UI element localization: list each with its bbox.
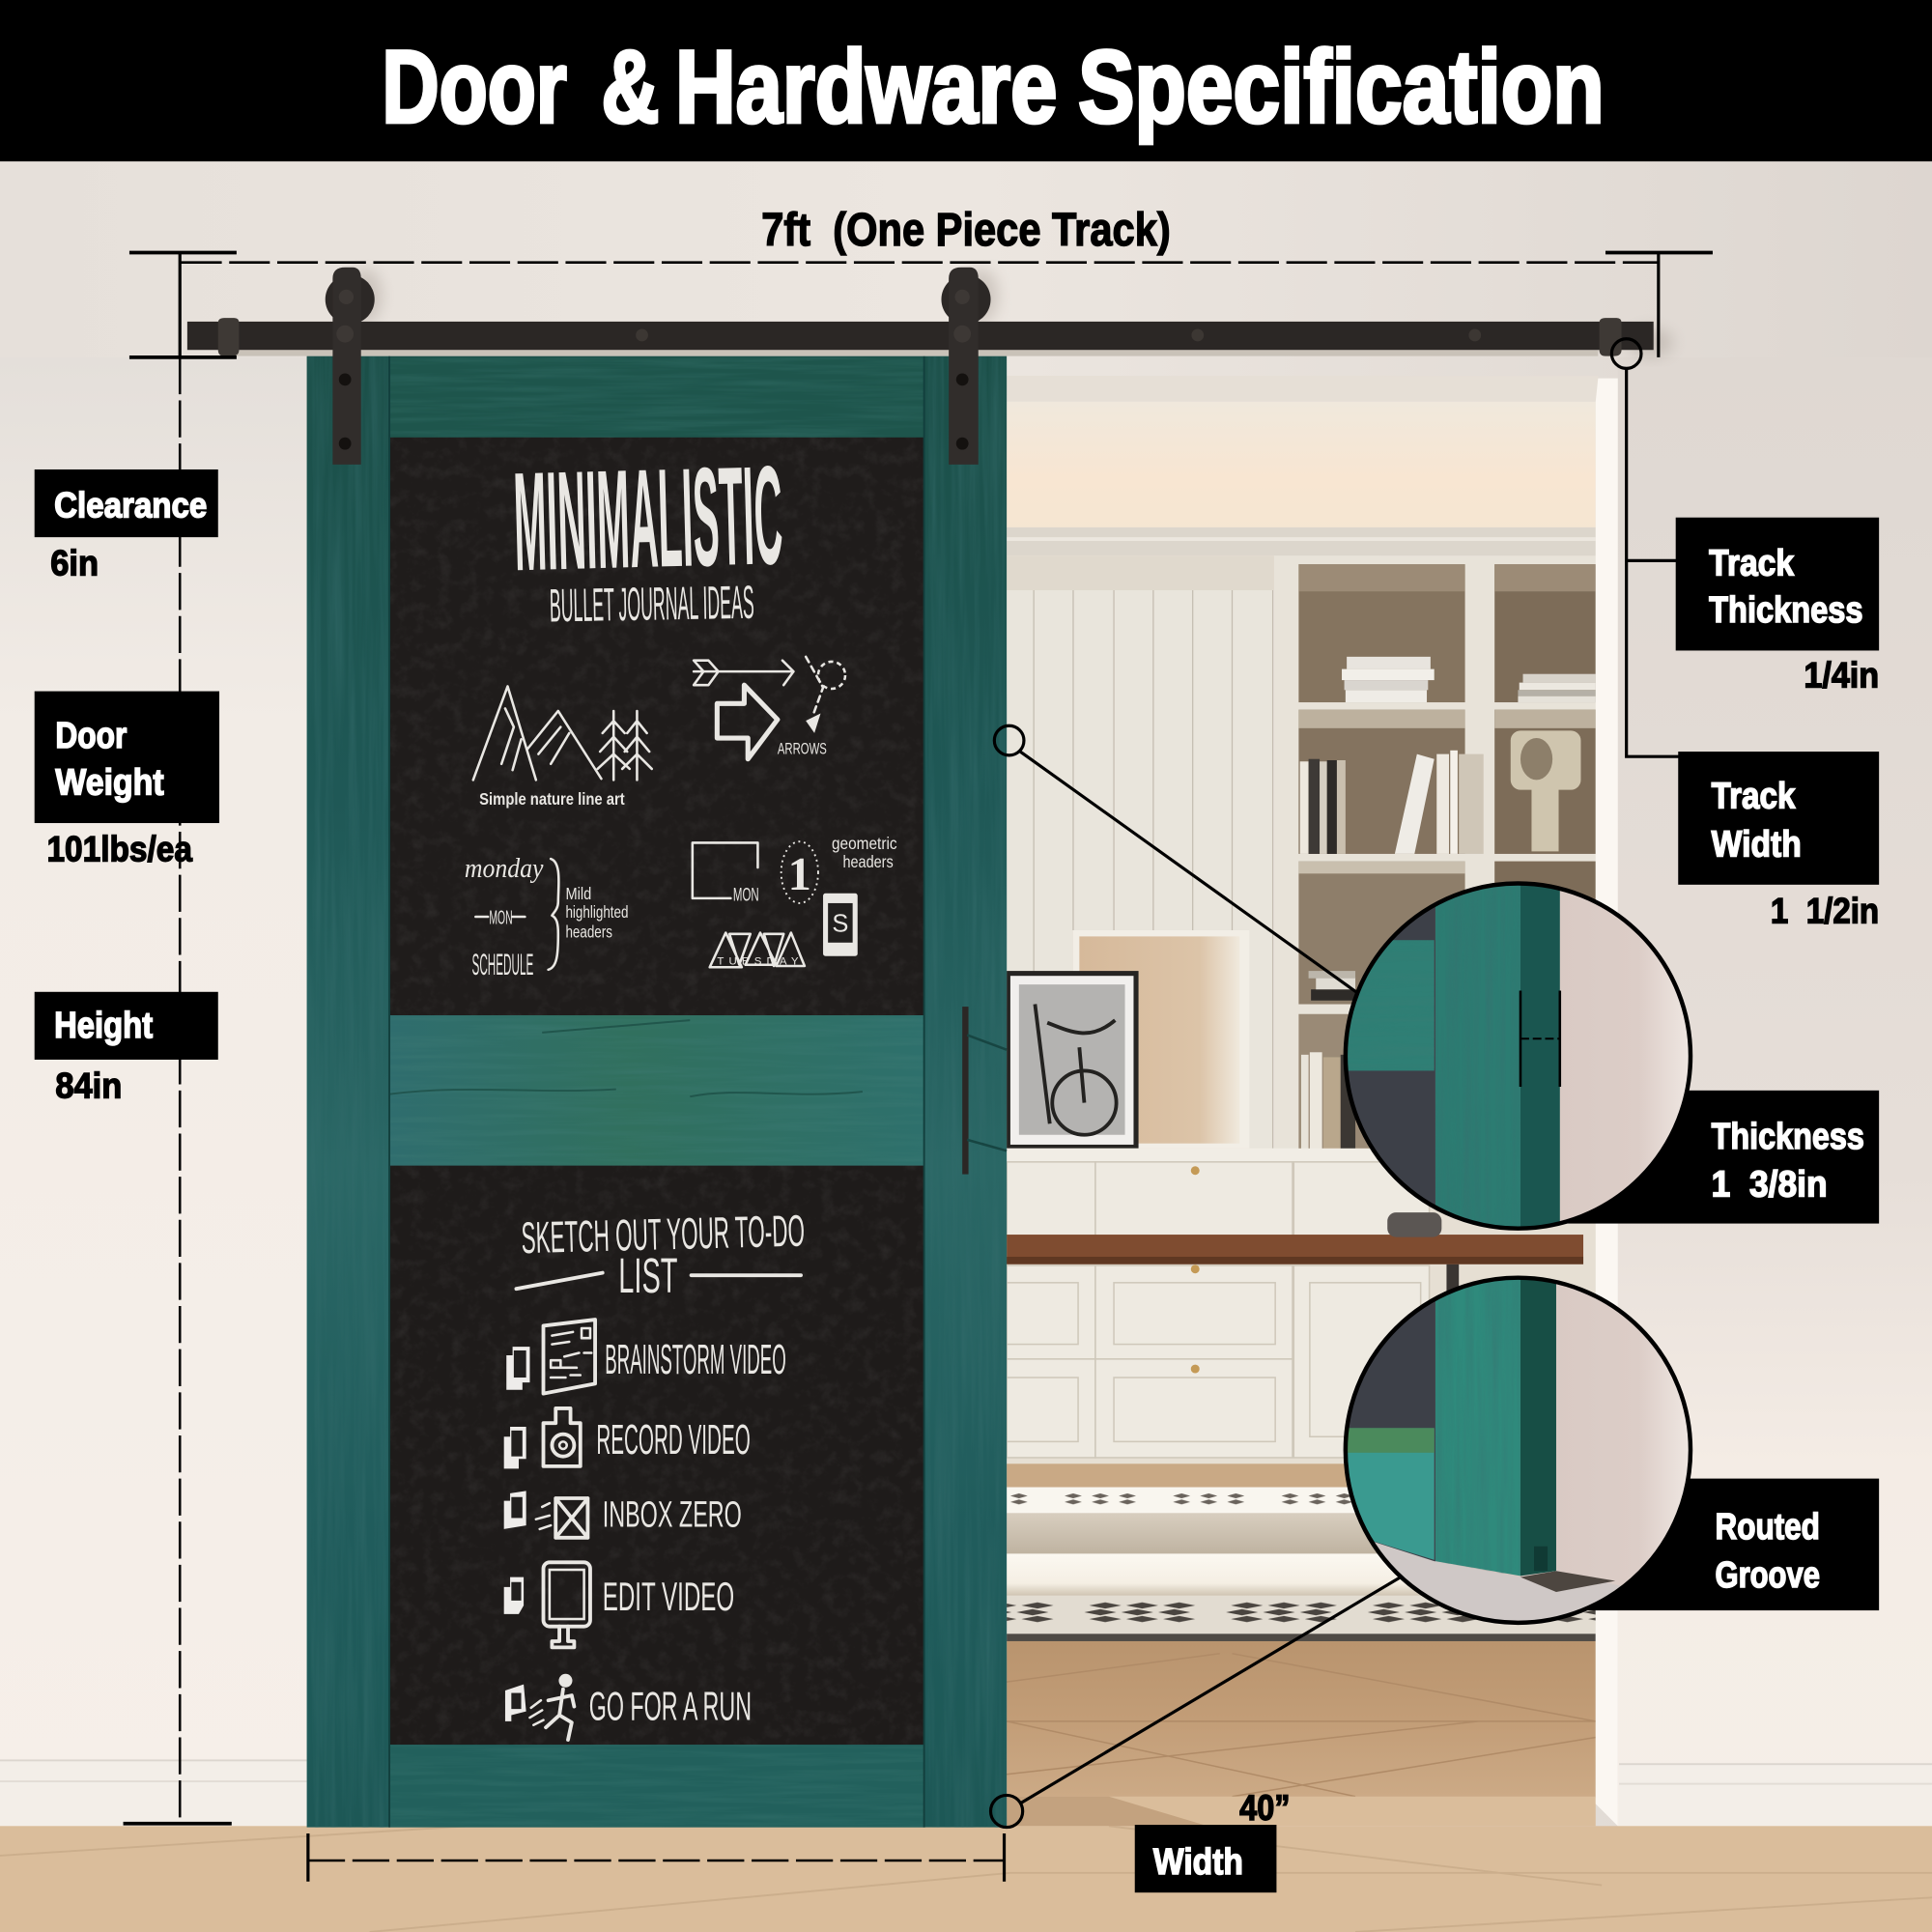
label: door weight: Weight	[55, 762, 164, 804]
checklist: edit video	[504, 1562, 734, 1647]
rug and interior floor	[1007, 1463, 1596, 1826]
lower chalkboard panel	[389, 1166, 924, 1745]
mild highlighted headers: SCHEDULE	[472, 947, 533, 981]
title banner: &	[601, 28, 659, 144]
mild highlighted headers: highlighted	[565, 902, 629, 922]
value: width: 40”	[1239, 1788, 1290, 1828]
dimension: door width	[308, 1833, 1005, 1882]
track stop left	[218, 318, 239, 356]
value: door weight: 101lbs/ea	[46, 830, 192, 869]
value: track thickness: 1/4in	[1804, 656, 1879, 696]
geometric headers: TUESDAY	[717, 956, 799, 968]
label: width	[1135, 1825, 1276, 1892]
label: thickness	[1518, 1091, 1879, 1224]
mild highlighted headers: headers	[565, 923, 612, 942]
icon: arrows	[694, 657, 845, 759]
top rail	[389, 357, 924, 438]
label: clearance	[35, 469, 218, 537]
checklist: edit video: EDIT VIDEO	[603, 1574, 734, 1619]
sliding track	[187, 322, 1654, 356]
label: routed groove	[1518, 1479, 1879, 1610]
geometric headers	[693, 834, 897, 968]
infographic canvas: SKETCH OUT YOUR TO-DO	[521, 1206, 806, 1263]
mild highlighted headers	[465, 854, 629, 981]
label: track thickness: Track	[1709, 543, 1795, 584]
framed art	[1007, 930, 1249, 1149]
label: track width	[1678, 752, 1879, 885]
chalk art upper panel	[465, 436, 897, 981]
label: routed groove: Routed	[1716, 1506, 1820, 1548]
hardware shadows on wall	[348, 269, 1673, 357]
title banner: Specification	[1078, 28, 1605, 144]
door frame wood	[307, 356, 1007, 1828]
track stop right	[1600, 318, 1622, 356]
label: door weight	[35, 692, 219, 823]
title banner	[0, 0, 1932, 161]
chalk art lower panel: RECORD VIDEO	[596, 1417, 751, 1463]
chalk art lower panel	[504, 1206, 806, 1740]
value: track width: 1 1/2in	[1771, 891, 1879, 930]
title banner: Hardware	[675, 28, 1057, 144]
detail circle: routed groove	[1346, 1278, 1690, 1627]
checklist: go for a run	[505, 1674, 752, 1740]
infographic canvas: BRAINSTORM VIDEO	[605, 1337, 786, 1383]
value: clearance: 6in	[50, 544, 99, 583]
detail circle: door thickness	[1346, 884, 1690, 1229]
label: track width: Track	[1712, 776, 1796, 817]
upper chalkboard panel	[389, 438, 924, 1015]
checklist: go for a run: GO FOR A RUN	[589, 1684, 752, 1729]
table and cup	[1007, 1212, 1583, 1292]
baseboards	[0, 1759, 1932, 1826]
base cabinets	[1007, 1149, 1598, 1470]
mild highlighted headers: Mild	[565, 884, 591, 903]
icon: arrows: ARROWS	[778, 740, 827, 758]
label: thickness: Thickness	[1712, 1116, 1864, 1157]
checklist: record video	[504, 1408, 751, 1468]
geometric headers: S	[832, 910, 848, 937]
dimension: track length	[129, 252, 1713, 357]
floor	[0, 1826, 1932, 1932]
books	[1300, 657, 1596, 1150]
geometric headers: headers	[842, 852, 894, 871]
checklist: inbox zero	[504, 1491, 742, 1538]
hanger left	[326, 268, 375, 465]
geometric headers: MON	[733, 885, 759, 905]
ceiling and crown moulding	[1007, 376, 1598, 555]
sculpture	[1511, 730, 1580, 851]
mild highlighted headers: monday	[465, 854, 544, 884]
middle rail	[389, 1015, 924, 1166]
value: track length: 7ft (One Piece Track)	[761, 204, 1171, 256]
leader: thickness callout	[994, 725, 1358, 993]
mild highlighted headers: MON	[489, 908, 513, 929]
barn door	[307, 356, 1007, 1828]
hanger right	[941, 268, 991, 465]
infographic canvas: MINIMALISTIC	[512, 436, 784, 600]
chalk heading	[512, 436, 784, 632]
room seen through doorway	[1007, 376, 1598, 1826]
leader: track callouts	[1611, 339, 1680, 756]
label: track thickness	[1676, 518, 1879, 650]
checklist: inbox zero: INBOX ZERO	[603, 1493, 742, 1535]
chalk heading to-do: LIST	[618, 1248, 678, 1303]
label: height: Height	[54, 1005, 153, 1046]
label: width: Width	[1153, 1841, 1243, 1883]
value: height: 84in	[55, 1065, 122, 1105]
bookshelf	[1274, 555, 1598, 1159]
leader: routed groove callout	[991, 1575, 1405, 1828]
chalk heading to-do	[516, 1206, 806, 1303]
checklist: brainstorm video	[506, 1320, 786, 1394]
title banner: Door	[382, 28, 567, 144]
label: track width: Width	[1712, 823, 1802, 865]
label: routed groove: Groove	[1716, 1554, 1820, 1596]
door handle	[962, 1007, 1007, 1175]
label: thickness: 1 3/8in	[1712, 1164, 1828, 1206]
dimension: door height	[124, 357, 232, 1824]
label: height	[35, 992, 218, 1060]
chalk art upper panel: BULLET JOURNAL IDEAS	[549, 577, 754, 632]
panelled back wall	[1007, 555, 1275, 1166]
geometric headers: geometric	[832, 834, 897, 853]
geometric headers: 1	[788, 849, 811, 900]
icon: mountains and trees	[473, 686, 652, 809]
label: door weight: Door	[55, 715, 127, 756]
bottom rail	[389, 1745, 924, 1828]
icon: mountains and trees: Simple nature line art	[479, 789, 625, 809]
label: clearance: Clearance	[54, 486, 207, 526]
label: track thickness: Thickness	[1709, 589, 1863, 631]
door trim	[1596, 379, 1618, 1826]
